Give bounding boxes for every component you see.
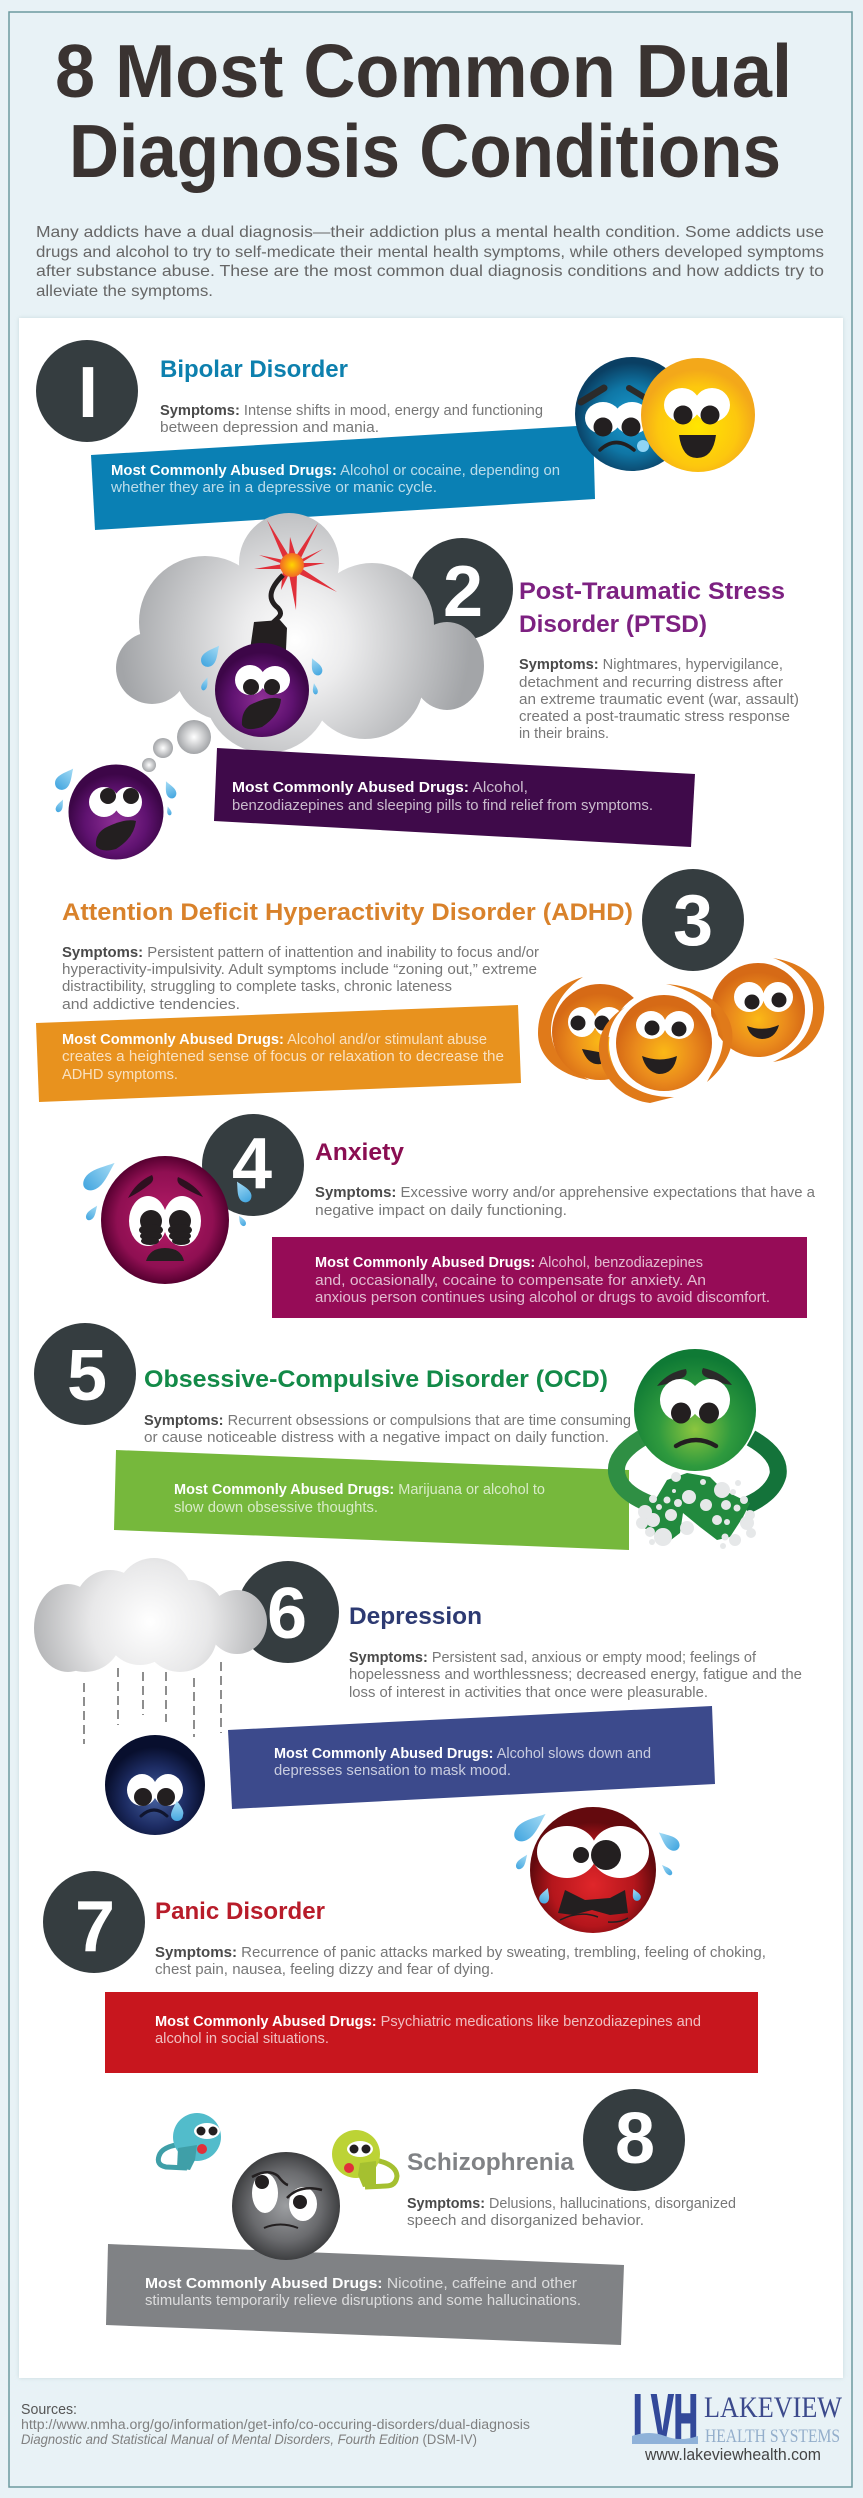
logo: Lakeview Health Systems: HEALTH SYSTEMS bbox=[705, 2427, 840, 2447]
heading: schizophrenia: Schizophrenia bbox=[407, 2149, 575, 2176]
title bbox=[55, 29, 792, 193]
drugs band bbox=[105, 1992, 758, 2073]
logo mark bbox=[632, 2380, 698, 2458]
logo: Lakeview Health Systems: LVH bbox=[633, 2380, 698, 2458]
number badge 4: 4 bbox=[232, 1124, 272, 1204]
drugs band bbox=[91, 425, 595, 530]
symptoms text: speech and disorganized behavior. bbox=[407, 2213, 644, 2229]
drugs band: anxious person continues using alcohol or drugs to avoid discomfort. bbox=[315, 1290, 770, 1306]
intro paragraph: after substance abuse. These are the most common dual diagnosis conditions and how addicts try to bbox=[36, 263, 824, 280]
drugs band: creates a heightened sense of focus or relaxation to decrease the bbox=[62, 1049, 504, 1065]
drugs band: slow down obsessive thoughts. bbox=[174, 1500, 378, 1516]
section 4: anxiety bbox=[79, 1114, 816, 1318]
symptoms text: distractibility, struggling to complete tasks, chronic lateness bbox=[62, 979, 452, 995]
intro paragraph bbox=[36, 224, 824, 300]
thought cloud bbox=[116, 513, 484, 753]
section 3: ADHD bbox=[36, 869, 824, 1103]
drugs band bbox=[228, 1706, 715, 1809]
symptoms text: detachment and recurring distress after bbox=[519, 675, 783, 691]
intro paragraph: Many addicts have a dual diagnosis—their addiction plus a mental health condition. Some addicts use bbox=[36, 224, 824, 241]
sources bbox=[21, 2401, 530, 2447]
section 2: PTSD bbox=[52, 513, 799, 860]
heading: PTSD: Disorder (PTSD) bbox=[519, 611, 707, 638]
icon: sad navy face bbox=[105, 1735, 205, 1835]
heading: OCD: Obsessive-Compulsive Disorder (OCD) bbox=[144, 1366, 608, 1393]
symptoms text: an extreme traumatic event (war, assault) bbox=[519, 692, 799, 708]
symptoms text: between depression and mania. bbox=[160, 420, 379, 436]
symptoms text: Symptoms: Recurrence of panic attacks marked by sweating, trembling, feeling of choking, bbox=[155, 1945, 766, 1961]
drugs band bbox=[114, 1450, 629, 1550]
drugs band: and, occasionally, cocaine to compensate for anxiety. An bbox=[315, 1273, 706, 1289]
symptoms text: loss of interest in activities that once were pleasurable. bbox=[349, 1685, 708, 1701]
drugs band: ADHD symptoms. bbox=[62, 1067, 178, 1083]
drugs band: Most Commonly Abused Drugs: Nicotine, caffeine and other bbox=[145, 2276, 577, 2292]
number badge 5: 5 bbox=[67, 1336, 107, 1416]
number badge 3: 3 bbox=[673, 881, 713, 961]
drugs band: Most Commonly Abused Drugs: Alcohol, benzodiazepines bbox=[315, 1255, 703, 1271]
symptoms text: Symptoms: Recurrent obsessions or compulsions that are time consuming bbox=[144, 1413, 631, 1429]
number badge 7 bbox=[43, 1871, 145, 1973]
number badge 1 bbox=[36, 340, 138, 442]
symptoms text: Symptoms: Persistent pattern of inattention and inability to focus and/or bbox=[62, 945, 539, 961]
symptoms text: Symptoms: Intense shifts in mood, energy and functioning bbox=[160, 403, 543, 419]
section 1: bipolar disorder bbox=[36, 340, 755, 530]
drugs band bbox=[272, 1237, 807, 1318]
symptoms text: hopelessness and worthlessness; decreased energy, fatigue and the bbox=[349, 1667, 802, 1683]
section 5: OCD bbox=[34, 1323, 778, 1550]
logo: Lakeview Health Systems: www.lakeviewhealth.com bbox=[644, 2445, 821, 2464]
symptoms text: Symptoms: Delusions, hallucinations, disorganized bbox=[407, 2196, 736, 2212]
drugs band: Most Commonly Abused Drugs: Psychiatric medications like benzodiazepines and bbox=[155, 2014, 701, 2030]
sources: Diagnostic and Statistical Manual of Mental Disorders, Fourth Edition (DSM-IV) bbox=[21, 2432, 477, 2447]
drugs band: Most Commonly Abused Drugs: Marijuana or alcohol to bbox=[174, 1482, 545, 1498]
symptoms text: or cause noticeable distress with a negative impact on daily function. bbox=[144, 1430, 609, 1446]
symptoms text bbox=[315, 1185, 816, 1219]
symptoms text bbox=[407, 2196, 736, 2229]
drugs band: Most Commonly Abused Drugs: Alcohol and/or stimulant abuse bbox=[62, 1032, 487, 1048]
symptoms text: Symptoms: Nightmares, hypervigilance, bbox=[519, 657, 783, 673]
icon: three hyperactive orange faces bbox=[538, 958, 824, 1103]
drugs band: benzodiazepines and sleeping pills to find relief from symptoms. bbox=[232, 798, 653, 814]
drugs band: stimulants temporarily relieve disruptions and some hallucinations. bbox=[145, 2293, 581, 2309]
drugs band bbox=[106, 2244, 624, 2345]
heading: PTSD: Post-Traumatic Stress bbox=[519, 578, 785, 605]
title: 8 Most Common Dual bbox=[55, 29, 792, 113]
symptoms text: and addictive tendencies. bbox=[62, 997, 240, 1013]
symptoms text bbox=[144, 1413, 631, 1446]
heading: PTSD bbox=[519, 578, 785, 638]
section 6: depression bbox=[34, 1558, 802, 1835]
heading: anxiety: Anxiety bbox=[315, 1139, 405, 1166]
number badge 3 bbox=[642, 869, 744, 971]
icon: small lime whispering face bbox=[332, 2130, 397, 2187]
symptoms text: created a post-traumatic stress response bbox=[519, 709, 790, 725]
intro paragraph: alleviate the symptoms. bbox=[36, 283, 213, 300]
drugs band: Most Commonly Abused Drugs: Alcohol slows down and bbox=[274, 1746, 651, 1762]
number badge 6: 6 bbox=[267, 1574, 307, 1654]
heading: bipolar disorder: Bipolar Disorder bbox=[160, 356, 348, 383]
drugs band: Most Commonly Abused Drugs: Alcohol, bbox=[232, 780, 528, 796]
symptoms text: in their brains. bbox=[519, 726, 609, 742]
drugs band bbox=[214, 748, 695, 847]
number badge 7: 7 bbox=[75, 1887, 115, 1967]
drugs band: whether they are in a depressive or manic cycle. bbox=[110, 480, 437, 496]
rain drops bbox=[84, 1662, 221, 1744]
symptoms text: Symptoms: Persistent sad, anxious or empty mood; feelings of bbox=[349, 1650, 757, 1666]
drugs band bbox=[36, 1005, 521, 1102]
number badge 2: 2 bbox=[443, 552, 483, 632]
sources: Sources: bbox=[21, 2401, 77, 2418]
drugs band: depresses sensation to mask mood. bbox=[274, 1763, 511, 1779]
icon: suspicious grey face bbox=[232, 2152, 340, 2260]
logo: Lakeview Health Systems: LAKEVIEW bbox=[704, 2391, 843, 2424]
symptoms text bbox=[155, 1945, 766, 1978]
icon: bomb with spark bbox=[198, 520, 337, 737]
sources: http://www.nmha.org/go/information/get-info/co-occuring-disorders/dual-diagnosis bbox=[21, 2417, 530, 2432]
drugs band: Most Commonly Abused Drugs: Alcohol or cocaine, depending on bbox=[111, 463, 560, 479]
number badge 8 bbox=[583, 2089, 685, 2191]
thought bubbles bbox=[142, 720, 211, 772]
rain cloud bbox=[34, 1558, 267, 1672]
symptoms text bbox=[349, 1650, 802, 1701]
number badge 8: 8 bbox=[615, 2099, 655, 2179]
symptoms text: hyperactivity-impulsivity. Adult symptoms include “zoning out,” extreme bbox=[62, 962, 537, 978]
icon: worried purple face bbox=[52, 764, 178, 860]
icon: anxious magenta face bbox=[79, 1156, 254, 1284]
icon: panicked red face bbox=[510, 1807, 682, 1933]
symptoms text bbox=[160, 403, 543, 436]
drugs band: alcohol in social situations. bbox=[155, 2031, 329, 2047]
intro paragraph: drugs and alcohol to try to self-medicate their mental health symptoms, while others developed symptoms bbox=[36, 244, 824, 261]
logo: Lakeview Health Systems bbox=[632, 2380, 843, 2464]
title: Diagnosis Conditions bbox=[69, 109, 781, 193]
number badge 6 bbox=[237, 1561, 339, 1663]
number badge 2 bbox=[411, 538, 513, 640]
number badge 4 bbox=[202, 1114, 304, 1216]
number badge 1: I bbox=[78, 353, 98, 433]
symptoms text bbox=[62, 945, 539, 1013]
symptoms text bbox=[519, 657, 799, 742]
symptoms text: chest pain, nausea, feeling dizzy and fear of dying. bbox=[155, 1962, 494, 1978]
symptoms text: Symptoms: Excessive worry and/or apprehensive expectations that have a bbox=[315, 1185, 816, 1201]
heading: panic disorder: Panic Disorder bbox=[155, 1898, 325, 1925]
icon: green face washing hands bbox=[616, 1349, 778, 1549]
icon: small blue whispering face bbox=[158, 2113, 221, 2170]
symptoms text: negative impact on daily functioning. bbox=[315, 1203, 567, 1219]
section 7: panic disorder bbox=[43, 1807, 766, 2073]
heading: ADHD: Attention Deficit Hyperactivity Disorder (ADHD) bbox=[62, 899, 633, 926]
icon: sad blue face and happy yellow face bbox=[575, 357, 755, 472]
section 8: schizophrenia bbox=[106, 2089, 736, 2345]
number badge 5 bbox=[34, 1323, 136, 1425]
heading: depression: Depression bbox=[349, 1603, 482, 1630]
white content panel bbox=[19, 318, 843, 2378]
